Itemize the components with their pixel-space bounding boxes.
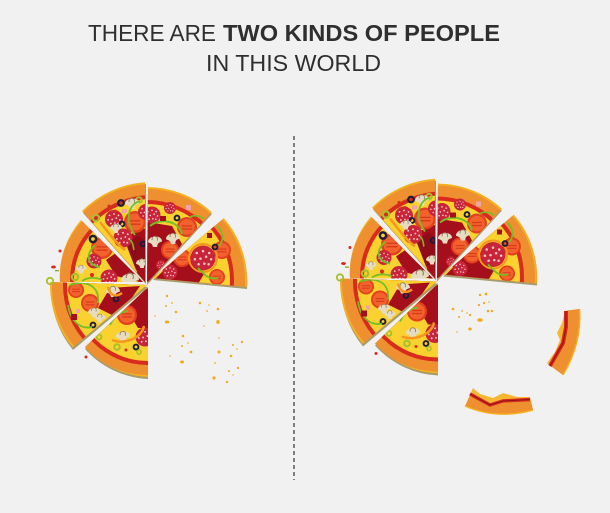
slice: left lower	[50, 278, 438, 350]
right pizza: same six slices shifted	[337, 178, 542, 378]
title: IN THIS WORLD	[206, 50, 381, 76]
leftover crust: right	[547, 309, 580, 375]
slice: right	[153, 214, 538, 289]
title: THERE ARE	[88, 20, 216, 46]
slice: top left	[52, 182, 252, 382]
slice: bottom	[58, 197, 238, 379]
left pizza: six slices	[47, 182, 252, 382]
title: TWO KINDS OF PEOPLE	[223, 20, 500, 46]
toppings that fell off the pizza	[47, 250, 88, 358]
left crumbs	[154, 295, 243, 383]
title	[88, 20, 500, 76]
slice: left upper	[60, 216, 433, 282]
leftover crust: bottom	[465, 388, 533, 414]
right crumbs	[452, 293, 493, 333]
slice: top right	[51, 187, 243, 379]
dashed divider	[293, 136, 295, 480]
